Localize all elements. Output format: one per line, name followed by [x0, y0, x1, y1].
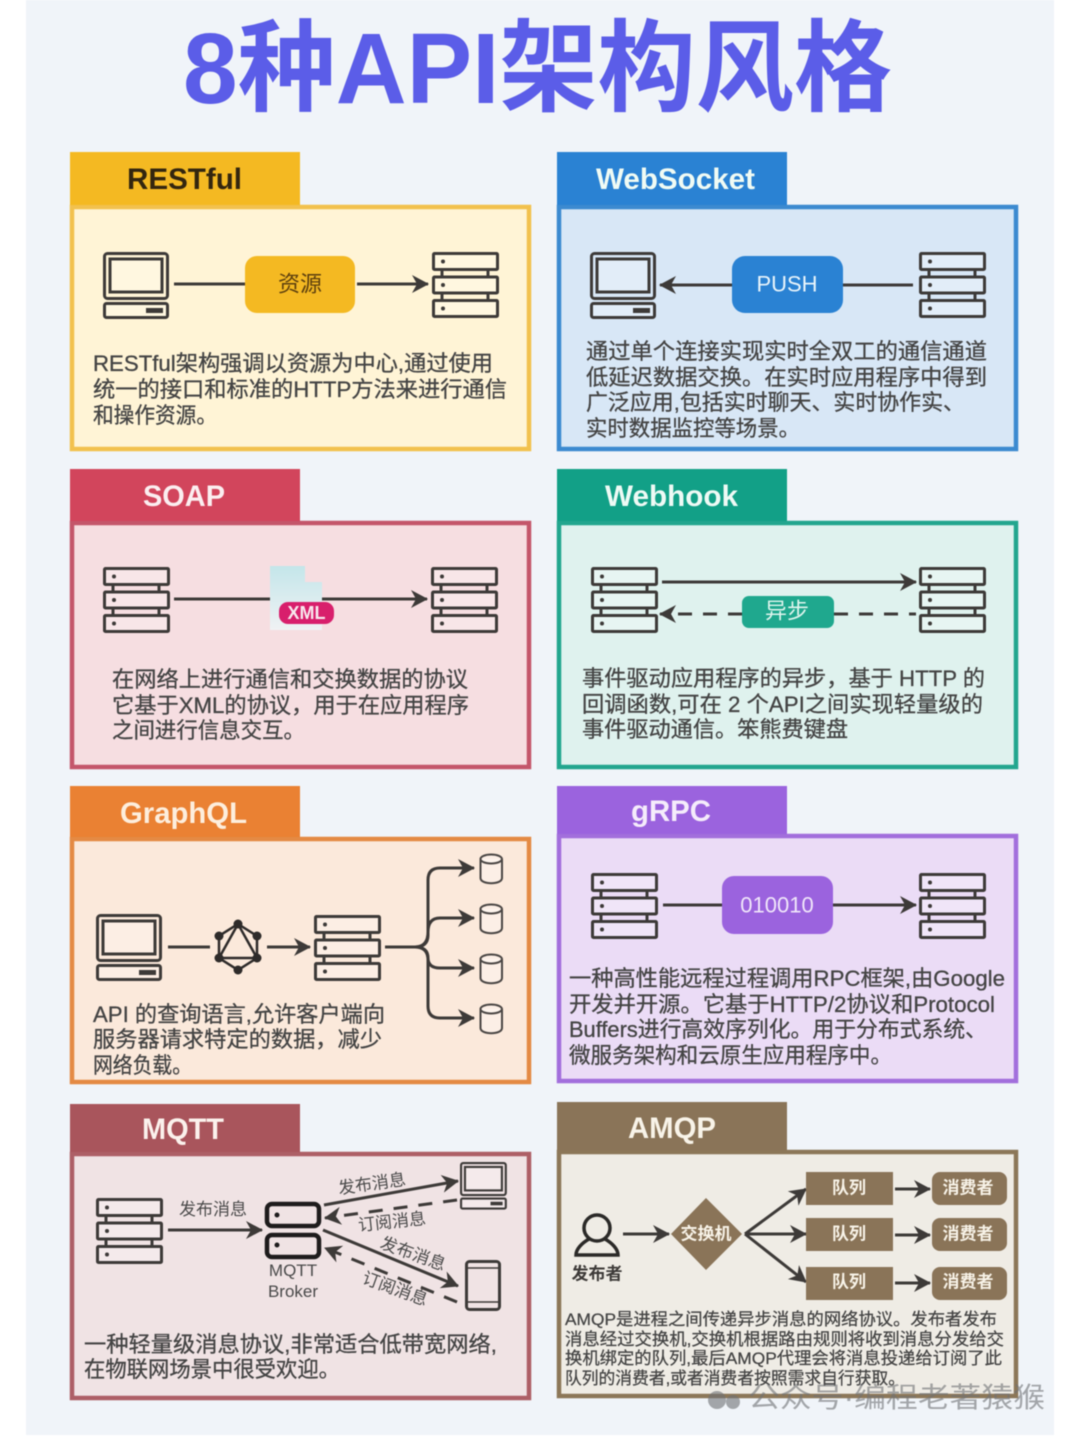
label: publisher: 发布者 — [572, 1264, 622, 1284]
description: 和操作资源。 — [93, 403, 217, 428]
icon: client monitor — [98, 916, 160, 980]
description: 在网络上进行通信和交换数据的协议 — [112, 667, 468, 692]
consumer labels — [942, 1178, 994, 1292]
title: 8种API架构风格 — [183, 13, 892, 125]
heading: MQTT — [70, 1104, 300, 1152]
connector: dashed — [834, 612, 916, 616]
labels: diagonal messages: 发布消息 — [337, 1170, 407, 1198]
labels: diagonal messages: 订阅消息 — [360, 1268, 430, 1310]
heading: WebSocket — [557, 152, 787, 205]
resource pill: 资源 — [278, 272, 322, 296]
icon: server right — [920, 568, 984, 632]
async pill: 异步 — [765, 598, 809, 624]
icon: publisher person — [576, 1215, 618, 1255]
label: MQTT Broker: Broker — [268, 1282, 318, 1301]
description: RESTful架构强调以资源为中心,通过使用 — [93, 351, 493, 376]
consumer labels: 消费者 — [942, 1224, 994, 1244]
heading: GraphQL: GraphQL — [120, 797, 247, 830]
binary pill — [722, 876, 833, 934]
heading: gRPC — [557, 786, 787, 834]
watermark: 公众号·编程老著猿猴 — [748, 1382, 1045, 1413]
description: 统一的接口和标准的HTTP方法来进行通信 — [93, 377, 507, 402]
description: 在物联网场景中很受欢迎。 — [84, 1357, 340, 1382]
icon: subscriber monitor — [461, 1163, 506, 1209]
description: 一种高性能远程过程调用RPC框架,由Google — [569, 966, 1005, 991]
description: 队列的消费者,或者消费者按照需求自行获取。 — [565, 1369, 905, 1388]
panel: AMQP — [557, 1102, 1016, 1396]
consumer labels: 消费者 — [942, 1178, 994, 1198]
icon: server right — [432, 568, 496, 632]
description — [569, 966, 1005, 1068]
description: 实时数据监控等场景。 — [586, 416, 800, 441]
panel: Webhook — [557, 469, 1016, 767]
description: 一种轻量级消息协议,非常适合低带宽网络, — [84, 1332, 497, 1357]
queue labels: 队列 — [832, 1224, 866, 1244]
arrow: solid call — [662, 580, 916, 584]
heading: Webhook — [557, 469, 787, 521]
icon: server left — [592, 568, 656, 632]
icon: MQTT broker — [267, 1204, 319, 1257]
connector — [663, 904, 722, 906]
description: 消息经过交换机,交换机根据路由规则将收到消息分发给交 — [565, 1330, 1004, 1349]
icon: server — [920, 254, 984, 316]
arrow to server — [833, 904, 916, 906]
arrow to server — [267, 946, 310, 948]
exchange diamond — [671, 1198, 742, 1270]
description: 低延迟数据交换。在实时应用程序中得到 — [586, 365, 987, 390]
heading: MQTT: MQTT — [142, 1113, 224, 1146]
arrow: push to client — [660, 284, 732, 286]
label: MQTT Broker: MQTT — [269, 1261, 317, 1280]
panel: WebSocket — [557, 152, 1016, 449]
arrows: queues to consumers — [895, 1189, 930, 1283]
labels: diagonal messages — [337, 1170, 448, 1310]
icon: server right — [920, 874, 984, 938]
description: Buffers进行高效序列化。用于分布式系统、 — [569, 1017, 987, 1042]
binary pill: 010010 — [740, 892, 814, 918]
consumers — [932, 1172, 1007, 1300]
description: 事件驱动应用程序的异步，基于 HTTP 的 — [582, 666, 985, 691]
panel: RESTful — [70, 152, 529, 449]
description: 之间进行信息交互。 — [112, 718, 305, 743]
panel: MQTT — [70, 1104, 529, 1398]
description — [93, 351, 507, 428]
description: AMQP是进程之间传递异步消息的网络协议。发布者发布 — [565, 1310, 997, 1329]
arrow: dashed async — [660, 612, 742, 616]
icon: client monitor — [592, 254, 654, 318]
arrow: resource to server — [357, 282, 428, 286]
arrow to server — [322, 598, 427, 600]
label: publish: 发布消息 — [179, 1200, 247, 1219]
arrow: publish to broker — [168, 1228, 262, 1232]
heading: AMQP — [557, 1102, 787, 1150]
heading: RESTful: RESTful — [127, 163, 242, 196]
panel: GraphQL — [70, 786, 529, 1082]
connector: server to push — [843, 284, 913, 286]
heading: SOAP: SOAP — [143, 480, 225, 513]
icons: databases — [480, 854, 502, 1033]
icon: publisher server — [98, 1200, 162, 1262]
description: 通过单个连接实现实时全双工的通信通道 — [586, 339, 987, 364]
icon: tablet — [466, 1262, 500, 1310]
description — [586, 339, 987, 441]
async pill — [742, 596, 834, 628]
description: 广泛应用,包括实时聊天、实时协作实、 — [586, 390, 965, 415]
heading: Webhook: Webhook — [605, 480, 738, 513]
queues — [806, 1172, 893, 1300]
arrow: publisher to exchange — [623, 1232, 669, 1236]
connector — [168, 946, 210, 948]
heading: GraphQL — [70, 786, 300, 837]
icon: GraphQL logo — [214, 920, 262, 974]
description — [112, 667, 469, 743]
description — [565, 1310, 1004, 1388]
description — [84, 1332, 497, 1382]
resource pill — [245, 256, 355, 313]
icon: client monitor — [104, 254, 168, 318]
arrows: exchange to queues — [745, 1189, 806, 1282]
icon: server — [434, 254, 498, 316]
panel: gRPC — [557, 786, 1016, 1081]
branch arrows — [385, 868, 474, 1018]
description: 网络负载。 — [93, 1053, 192, 1078]
arrows: publish and subscribe — [323, 1181, 458, 1302]
queue labels — [832, 1178, 866, 1292]
queue labels: 队列 — [832, 1178, 866, 1198]
description: API 的查询语言,允许客户端向 — [93, 1002, 385, 1027]
heading: SOAP — [70, 469, 300, 521]
labels: diagonal messages: 订阅消息 — [357, 1209, 427, 1235]
labels: diagonal messages: 发布消息 — [378, 1233, 448, 1275]
icon: server — [316, 916, 380, 980]
description: 开发并开源。它基于HTTP/2协议和Protocol — [569, 992, 995, 1017]
panel: SOAP — [70, 469, 529, 767]
description: 服务器请求特定的数据，减少 — [93, 1027, 382, 1052]
description — [93, 1002, 385, 1078]
arrow: client to resource — [174, 282, 245, 286]
icon: XML document: XML — [288, 603, 326, 623]
push pill — [732, 256, 843, 313]
heading: AMQP: AMQP — [628, 1112, 716, 1145]
heading: RESTful — [70, 152, 300, 205]
description — [582, 666, 985, 742]
exchange diamond: 交换机 — [680, 1224, 732, 1244]
description: 换机绑定的队列,最后AMQP代理会将消息投递给订阅了此 — [565, 1349, 1002, 1368]
description: 它基于XML的协议，用于在应用程序 — [112, 693, 469, 718]
label: MQTT Broker — [268, 1261, 318, 1301]
consumer labels: 消费者 — [942, 1272, 994, 1292]
description: 微服务架构和云原生应用程序中。 — [569, 1043, 892, 1068]
description: 回调函数,可在 2 个API之间实现轻量级的 — [582, 692, 983, 717]
icon: server left — [592, 874, 656, 938]
description: 事件驱动通信。笨熊费键盘 — [582, 717, 848, 742]
connector to XML — [174, 598, 270, 600]
icon: XML document — [270, 566, 334, 630]
push pill: PUSH — [756, 272, 818, 296]
icon: server left — [104, 568, 168, 632]
heading: gRPC: gRPC — [631, 795, 711, 828]
queue labels: 队列 — [832, 1272, 866, 1292]
heading: WebSocket: WebSocket — [596, 163, 755, 196]
